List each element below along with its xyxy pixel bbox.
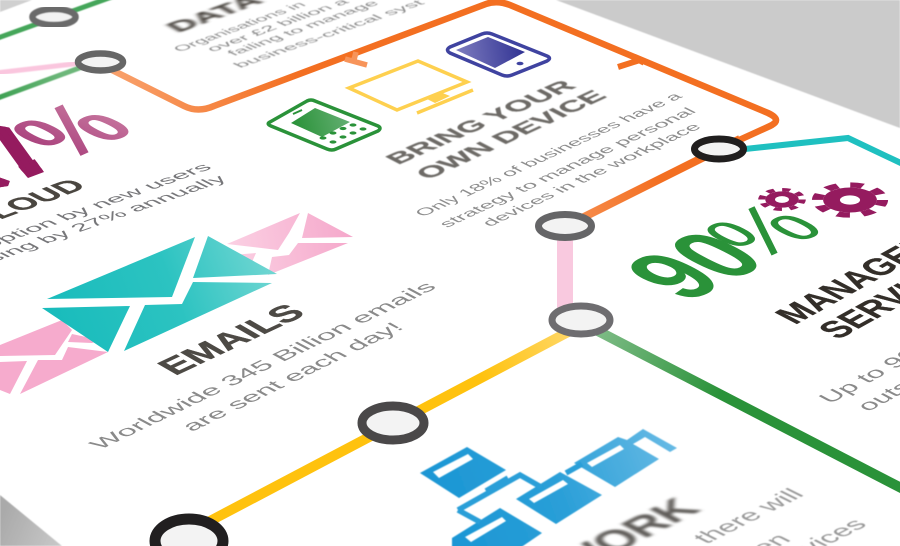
station: orange start	[78, 54, 123, 70]
text: network body: there will	[686, 485, 810, 546]
tick: orange branch one	[345, 52, 367, 65]
text: network body	[677, 485, 873, 546]
text: byod body: strategy to manage personal	[435, 106, 701, 230]
line: orange lower	[580, 139, 740, 219]
icon: pink envelope right	[220, 213, 353, 275]
text: data body: business-critical syst	[229, 0, 428, 69]
stat: 21 percent cloud	[0, 104, 128, 188]
folder three	[574, 429, 677, 487]
backdrop: lower left corner	[0, 495, 62, 546]
folder two	[516, 472, 602, 524]
heading: bring your own device: OWN DEVICE	[409, 87, 613, 183]
heading: emails: EMAILS	[149, 299, 314, 380]
text: data body: Organisations in	[170, 0, 310, 53]
line: green to station	[0, 67, 82, 99]
line: yellow	[210, 330, 572, 521]
tick: orange branch two	[618, 58, 643, 67]
line: orange upper loop	[108, 2, 776, 142]
line: pink to station	[0, 63, 82, 73]
icon: mobile phone	[268, 100, 380, 150]
station: yellow middle	[362, 406, 424, 440]
line: teal	[745, 138, 900, 165]
folder four	[452, 508, 542, 546]
station: yellow green junction	[552, 306, 610, 334]
text: emails body: Worldwide 345 Billion emails	[85, 279, 442, 452]
text: byod body: Only 18% of businesses have a	[411, 91, 687, 219]
line: green lower	[596, 330, 900, 490]
station: yellow bottom	[155, 519, 223, 546]
text: byod body: devices in the workplace	[478, 121, 706, 229]
icon: gears	[762, 185, 882, 215]
connectors	[458, 464, 582, 522]
heading: bring your own device: BRING YOUR	[379, 77, 582, 167]
figure digits: 90	[598, 218, 791, 314]
icon: tablet	[448, 33, 550, 76]
stations	[32, 9, 744, 546]
figure percent: %	[679, 190, 847, 272]
icon: network folders	[420, 429, 677, 546]
text: data body: over £2 billion a	[202, 0, 353, 53]
icon: large gear	[818, 185, 882, 215]
icon: small gear	[762, 190, 802, 209]
icon: pink envelope left	[0, 320, 108, 394]
icon: desktop monitor	[349, 61, 473, 113]
folder one	[420, 447, 506, 498]
stat: 90 percent managed services	[598, 190, 847, 314]
line: top green	[0, 0, 120, 39]
line: pink vertical	[557, 238, 573, 308]
text: emails body: are sent each day!	[176, 320, 409, 434]
backdrop: upper right	[556, 0, 900, 128]
station: teal junction	[694, 139, 744, 159]
backdrop: upper left corner	[0, 0, 32, 12]
icon: teal envelope	[42, 236, 277, 352]
text: data body: failing to manage	[223, 0, 383, 57]
station: orange pink junction	[538, 214, 592, 238]
station: top green	[32, 9, 76, 25]
